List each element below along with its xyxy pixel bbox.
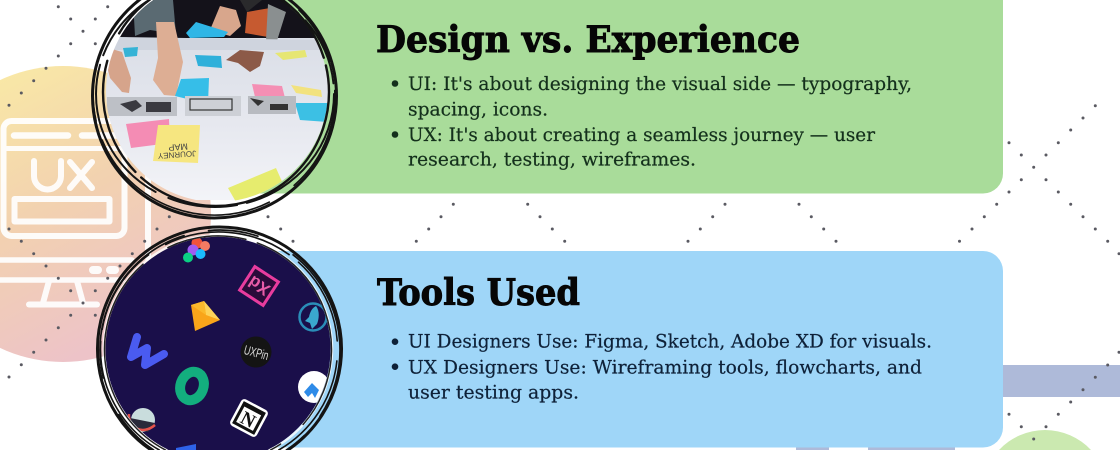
hands xyxy=(108,49,131,93)
heading: design vs experience: Design vs. Experience xyxy=(376,19,800,61)
heading: tools used: Tools Used xyxy=(377,272,580,314)
decorative green circle bottom right xyxy=(999,430,1091,450)
sticky note handwriting: MAP xyxy=(168,141,188,153)
bullet list: designer tools: user testing apps. xyxy=(408,382,579,403)
icon: half circle logo xyxy=(129,408,155,432)
bullet list: UI and UX: research, testing, wireframes. xyxy=(408,150,696,171)
icon: green O xyxy=(176,368,208,404)
icon: Notion xyxy=(230,399,268,437)
printed wireframe strips xyxy=(107,97,177,116)
bullet list: UI and UX: spacing, icons. xyxy=(408,100,548,121)
circular photo: team mapping a user journey with sticky notes xyxy=(91,0,338,220)
background blob: peach gradient circle xyxy=(0,66,211,362)
icon: Adobe XD xyxy=(240,267,278,305)
decorative bars along bottom edge xyxy=(796,447,955,450)
hand-drawn ring xyxy=(98,227,342,450)
icon: blue logo at edge xyxy=(176,444,196,450)
icon: UX monitor outline xyxy=(0,121,148,304)
circular image: design tool logos xyxy=(98,227,342,450)
bullet list: designer tools xyxy=(392,332,932,403)
icon: Figma xyxy=(183,238,210,262)
panel: design vs experience xyxy=(250,0,1003,194)
icon: UXPin xyxy=(240,336,272,368)
bullet list: UI and UX: UI: It's about designing the visual side — typography, xyxy=(408,74,912,95)
icon: UXPin: UXPin xyxy=(242,342,270,363)
bullet list: designer tools: UI Designers Use: Figma, Sketch, Adobe XD for visuals. xyxy=(408,332,932,353)
sticky notes xyxy=(123,47,138,57)
decorative bar right xyxy=(1003,365,1120,397)
panel: tools used xyxy=(250,251,1003,448)
bullet list: designer tools: UX Designers Use: Wireframing tools, flowcharts, and xyxy=(408,357,922,378)
circular photo: team mapping a user journey with sticky notes: JOURNEY xyxy=(157,149,196,160)
bullet list: UI and UX: UX: It's about creating a seamless journey — user xyxy=(408,125,875,146)
icon: Notion: N xyxy=(237,408,259,433)
icon: white circle logo xyxy=(298,371,330,403)
bullet list: UI and UX xyxy=(392,74,912,171)
hand-drawn ring xyxy=(59,0,369,249)
icon: Adobe XD: Xd xyxy=(245,272,274,299)
dots over right bar and green circle xyxy=(1008,351,1120,440)
icon: Sketch xyxy=(191,301,220,331)
icon: Webflow W xyxy=(131,337,164,365)
icon: rocket xyxy=(300,304,326,330)
